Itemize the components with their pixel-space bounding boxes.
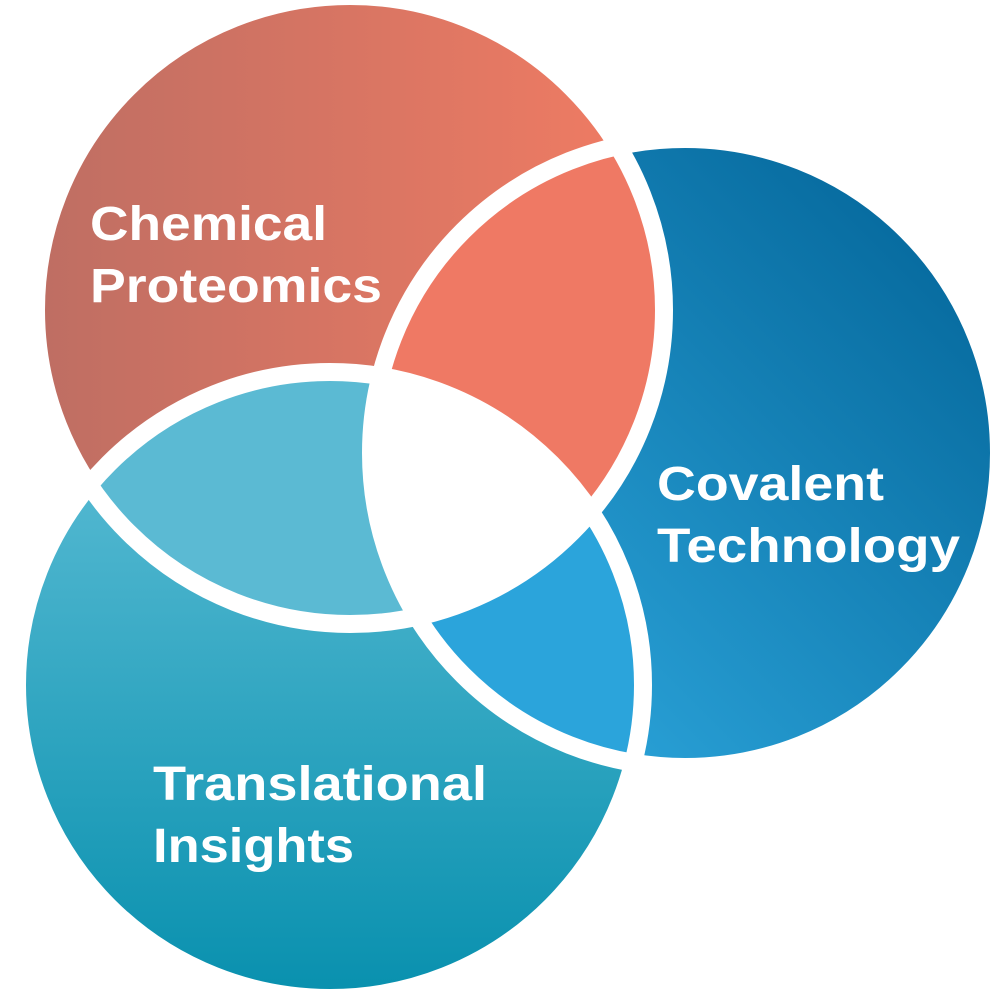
venn diagram: Technology: [657, 520, 960, 573]
circle: chemical proteomics: [36, 0, 664, 624]
label: translational insights: Translational: [153, 758, 487, 811]
overlap: blue-teal: [432, 527, 634, 752]
overlap: red-blue: [392, 156, 655, 497]
overlap: red-teal: [101, 477, 403, 615]
venn diagram: Insights: [153, 820, 354, 873]
label: chemical proteomics: Chemical: [90, 198, 327, 251]
circle: translational insights: [17, 372, 643, 998]
circle: covalent technology: [371, 139, 999, 767]
venn diagram: Proteomics: [90, 260, 382, 313]
overlap: center: [380, 386, 580, 606]
label: covalent technology: Covalent: [657, 458, 884, 511]
